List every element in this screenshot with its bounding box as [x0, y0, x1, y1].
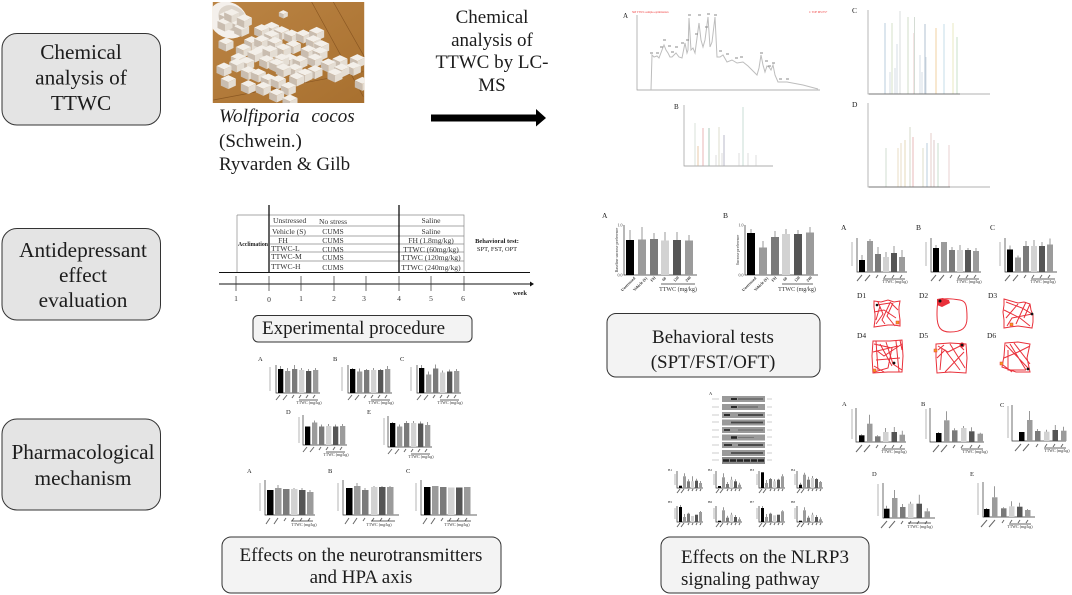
caption box: behavioral tests [607, 314, 820, 377]
photo caption: species name: Wolfiporia cocos [219, 106, 355, 127]
caption box: behavioral tests: (SPT/FST/OFT) [651, 352, 775, 373]
chart: neurotransmitter D: D [286, 409, 291, 416]
chart: sucrose preference: 0.0 [738, 272, 744, 278]
chart: sucrose preference: 240 [805, 275, 813, 283]
timeline: experimental schedule: TTWC (120mg/kg) [401, 253, 461, 262]
photo caption: species name [219, 106, 355, 175]
timeline: experimental schedule: 3 [362, 294, 366, 303]
timeline: experimental schedule: No stress [319, 217, 347, 226]
chart: chromatogram A: 1: TOF MS ES+ [809, 11, 828, 14]
timeline: experimental schedule: Saline [422, 216, 441, 225]
open-field trace D6 [987, 331, 1030, 372]
chart: baseline sucrose preference: 60 [661, 276, 667, 282]
chart: HPA axis C: TTWC (mg/kg) [444, 522, 470, 527]
panel: chemical analysis of TTWC label: analysis of [35, 66, 128, 90]
chart: sucrose preference: Vehicle (S) [753, 275, 770, 292]
timeline: experimental schedule: CUMS [322, 253, 344, 262]
chart: mRNA C: C [1000, 402, 1004, 409]
caption box: NLRP3 signaling pathway [661, 537, 869, 593]
chart: baseline sucrose preference [602, 211, 697, 293]
chart: mRNA C [1000, 402, 1070, 453]
timeline: experimental schedule: 1 [234, 294, 238, 303]
chart: protein quantification B6 [708, 500, 742, 527]
open-field trace D2 [919, 291, 967, 332]
western blot panel: A [709, 391, 713, 396]
chart: baseline sucrose preference: A [602, 211, 608, 220]
timeline: experimental schedule: CUMS [322, 227, 344, 236]
open-field trace D5 [919, 331, 967, 373]
chart: chromatogram C [852, 6, 990, 94]
panel: chemical analysis of TTWC label [2, 34, 160, 125]
chart: immobility B: B [916, 223, 921, 232]
chart: neurotransmitter B: TTWC (mg/kg) [368, 400, 394, 405]
panel: pharmacological mechanism label [2, 419, 160, 510]
arrow: to LC-MS chromatograms [431, 109, 546, 126]
chart: immobility A: A [841, 223, 847, 232]
chart: baseline sucrose preference: 120 [672, 275, 680, 283]
chart: chromatogram A [623, 11, 828, 90]
heading: chemical analysis by LC-MS: TTWC by LC- [436, 52, 548, 73]
panel: chemical analysis of TTWC label: Chemical [40, 40, 122, 64]
chart: chromatogram A: SM TTWC-sample-optimization [632, 11, 669, 14]
chart: chromatogram D [852, 100, 990, 187]
chart: immobility B: TTWC (mg/kg) [956, 279, 982, 284]
chart: mRNA A [842, 401, 907, 454]
timeline: experimental schedule: TTWC-L [271, 244, 300, 253]
timeline: experimental schedule: Behavioral test: [475, 238, 519, 245]
timeline: experimental schedule: Acclimation [238, 242, 269, 248]
caption box: NLRP3 signaling pathway: Effects on the NLRP3 [681, 547, 849, 568]
chart: immobility A: TTWC (mg/kg) [882, 279, 908, 284]
chart: immobility C [990, 223, 1057, 284]
panel: pharmacological mechanism label: Pharmacological [11, 440, 155, 464]
chart: sucrose preference: 1.0 [738, 222, 744, 228]
chart: mRNA B [921, 401, 988, 454]
chart: neurotransmitter C: C [400, 356, 404, 363]
chart: neurotransmitter D: TTWC (mg/kg) [323, 452, 349, 457]
chart: mRNA E: TTWC (mg/kg) [1007, 524, 1033, 529]
chart: neurotransmitter C: TTWC (mg/kg) [437, 400, 463, 405]
chart: HPA axis B: B [328, 468, 333, 475]
western blot panel [709, 391, 772, 464]
chart: mRNA B: B [921, 401, 926, 408]
chart: protein quantification B4 [791, 468, 823, 493]
chart: protein quantification B8: B8 [791, 500, 795, 504]
chart: protein quantification B6: B6 [708, 500, 712, 504]
heading: chemical analysis by LC-MS [436, 7, 548, 96]
timeline: experimental schedule: FH (1.8mg/kg) [408, 236, 454, 245]
timeline: experimental schedule [219, 205, 534, 304]
chart: protein quantification B3 [750, 468, 785, 493]
open-field trace D1 [857, 291, 900, 327]
timeline: experimental schedule: 5 [429, 294, 433, 303]
chart: sucrose preference: 60 [782, 276, 788, 282]
timeline: experimental schedule: 2 [332, 294, 336, 303]
panel: chemical analysis of TTWC label: TTWC [51, 91, 111, 115]
timeline: experimental schedule: FH [278, 236, 288, 245]
chart: sucrose preference: B [723, 211, 728, 220]
timeline: experimental schedule: SPT, FST, OPT [477, 246, 517, 253]
timeline: experimental schedule: TTWC-H [271, 262, 301, 271]
chart: chromatogram C: C [852, 6, 857, 15]
timeline: experimental schedule: 1 [299, 294, 303, 303]
chart: baseline sucrose preference: 240 [684, 275, 692, 283]
open-field trace D6: D6 [987, 331, 996, 340]
chart: HPA axis A [247, 468, 317, 527]
chart: sucrose preference: Sucrose preference [735, 235, 740, 265]
chart: HPA axis A: A [247, 468, 252, 475]
panel: antidepressant effect evaluation label: effect [59, 263, 107, 287]
chart: protein quantification B2 [708, 468, 742, 493]
chart: protein quantification B1 [668, 468, 703, 493]
chart: sucrose preference: FH [770, 275, 778, 283]
open-field trace D2: D2 [919, 291, 928, 300]
chart: immobility A [841, 223, 908, 284]
chart: protein quantification B7 [750, 500, 785, 527]
chart: chromatogram D: D [852, 100, 858, 109]
chart: baseline sucrose preference: Vehicle (S) [632, 275, 649, 292]
panel: pharmacological mechanism label: mechanism [34, 466, 132, 490]
caption box: experimental procedure: Experimental procedure [262, 318, 445, 339]
chart: protein quantification B2: B2 [708, 468, 712, 472]
open-field trace D4: D4 [857, 331, 866, 340]
chart: mRNA E [970, 471, 1035, 529]
chart: neurotransmitter C [400, 356, 463, 405]
chart: HPA axis A: TTWC (mg/kg) [291, 522, 317, 527]
chart: baseline sucrose preference: FH [649, 275, 657, 283]
chart: mRNA D: D [872, 471, 877, 478]
chart: protein quantification B1: B1 [668, 468, 672, 472]
caption box: neurotransmitters and HPA axis: and HPA axis [310, 567, 412, 588]
timeline: experimental schedule: CUMS [322, 245, 344, 254]
chart: mRNA A: TTWC (mg/kg) [881, 449, 907, 454]
caption box: neurotransmitters and HPA axis [222, 537, 501, 593]
chart: chromatogram B: B [674, 103, 679, 111]
heading: chemical analysis by LC-MS: MS [478, 75, 506, 96]
timeline: experimental schedule: TTWC-M [271, 252, 302, 261]
chart: neurotransmitter A: A [258, 356, 263, 363]
chart: HPA axis C [406, 468, 477, 527]
open-field trace D3: D3 [988, 291, 997, 300]
timeline: experimental schedule: CUMS [322, 263, 344, 272]
chart: chromatogram A: A [623, 12, 628, 20]
chart: neurotransmitter B [333, 356, 394, 405]
chart: mRNA E: E [970, 471, 974, 478]
chart: mRNA C: TTWC (mg/kg) [1044, 448, 1070, 453]
timeline: experimental schedule: Unstressed [273, 216, 307, 225]
photo caption: species name: Ryvarden & Gilb [219, 154, 350, 175]
chart: protein quantification B5: B5 [668, 500, 672, 504]
chart: baseline sucrose preference: Unstressed [620, 275, 637, 292]
chart: mRNA A: A [842, 401, 847, 408]
chart: immobility C: TTWC (mg/kg) [1030, 279, 1056, 284]
chart: chromatogram B [674, 103, 773, 166]
chart: HPA axis C: C [406, 468, 410, 475]
chart: baseline sucrose preference: 0.0 [618, 272, 622, 278]
chart: neurotransmitter E [367, 409, 434, 459]
panel: antidepressant effect evaluation label: evaluation [39, 288, 128, 312]
timeline: experimental schedule: CUMS [322, 236, 344, 245]
chart: protein quantification B5 [668, 500, 703, 527]
timeline: experimental schedule: TTWC (240mg/kg) [401, 263, 461, 272]
caption box: neurotransmitters and HPA axis: Effects on the neurotransmitters [240, 545, 482, 566]
chart: protein quantification B3: B3 [750, 468, 754, 472]
chart: baseline sucrose preference: Baseline sucrose preference [614, 227, 619, 272]
chart: neurotransmitter D [286, 409, 349, 457]
panel: antidepressant effect evaluation label: Antidepressant [19, 238, 147, 262]
chart: baseline sucrose preference: 1.0 [618, 222, 622, 228]
chart: mRNA D [872, 471, 935, 529]
caption box: behavioral tests: Behavioral tests [652, 327, 774, 348]
caption box: NLRP3 signaling pathway: signaling pathway [681, 569, 820, 590]
heading: chemical analysis by LC-MS: Chemical [456, 7, 528, 28]
chart: sucrose preference [723, 211, 818, 293]
chart: neurotransmitter A [258, 356, 322, 405]
timeline: experimental schedule: Saline [422, 227, 441, 236]
chart: neurotransmitter B: B [333, 356, 338, 363]
chart: neurotransmitter E: E [367, 409, 371, 416]
timeline: experimental schedule: week [513, 290, 527, 297]
chart: neurotransmitter E: TTWC (mg/kg) [408, 454, 434, 459]
open-field trace D5: D5 [919, 331, 928, 340]
photo caption: species name: (Schwein.) [219, 131, 302, 152]
panel: antidepressant effect evaluation label [2, 228, 160, 320]
chart: mRNA D: TTWC (mg/kg) [907, 524, 933, 529]
chart: sucrose preference: TTWC (mg/kg) [778, 286, 816, 293]
open-field trace D4 [857, 331, 903, 373]
open-field trace D3 [988, 291, 1033, 328]
timeline: experimental schedule: TTWC (60mg/kg) [403, 245, 459, 254]
chart: immobility B [916, 223, 982, 284]
timeline: experimental schedule: Vehicle (S) [272, 227, 306, 236]
chart: neurotransmitter A: TTWC (mg/kg) [296, 400, 322, 405]
chart: mRNA B: TTWC (mg/kg) [962, 449, 988, 454]
chart: protein quantification B4: B4 [791, 468, 795, 472]
chart: sucrose preference: 120 [793, 275, 801, 283]
photo: Wolfiporia cocos cubes on wood [212, 2, 364, 103]
chart: immobility C: C [990, 223, 995, 232]
chart: sucrose preference: Unstressed [741, 275, 758, 292]
heading: chemical analysis by LC-MS: analysis of [451, 30, 534, 51]
caption box: experimental procedure [253, 316, 472, 342]
chart: HPA axis B [328, 468, 399, 527]
timeline: experimental schedule: 0 [267, 295, 271, 304]
chart: protein quantification B8 [791, 500, 823, 527]
chart: protein quantification B7: B7 [750, 500, 754, 504]
timeline: experimental schedule: 4 [397, 294, 401, 303]
open-field trace D1: D1 [857, 291, 866, 300]
chart: baseline sucrose preference: TTWC (mg/kg) [659, 286, 697, 293]
chart: HPA axis B: TTWC (mg/kg) [366, 522, 392, 527]
timeline: experimental schedule: 6 [461, 294, 465, 303]
